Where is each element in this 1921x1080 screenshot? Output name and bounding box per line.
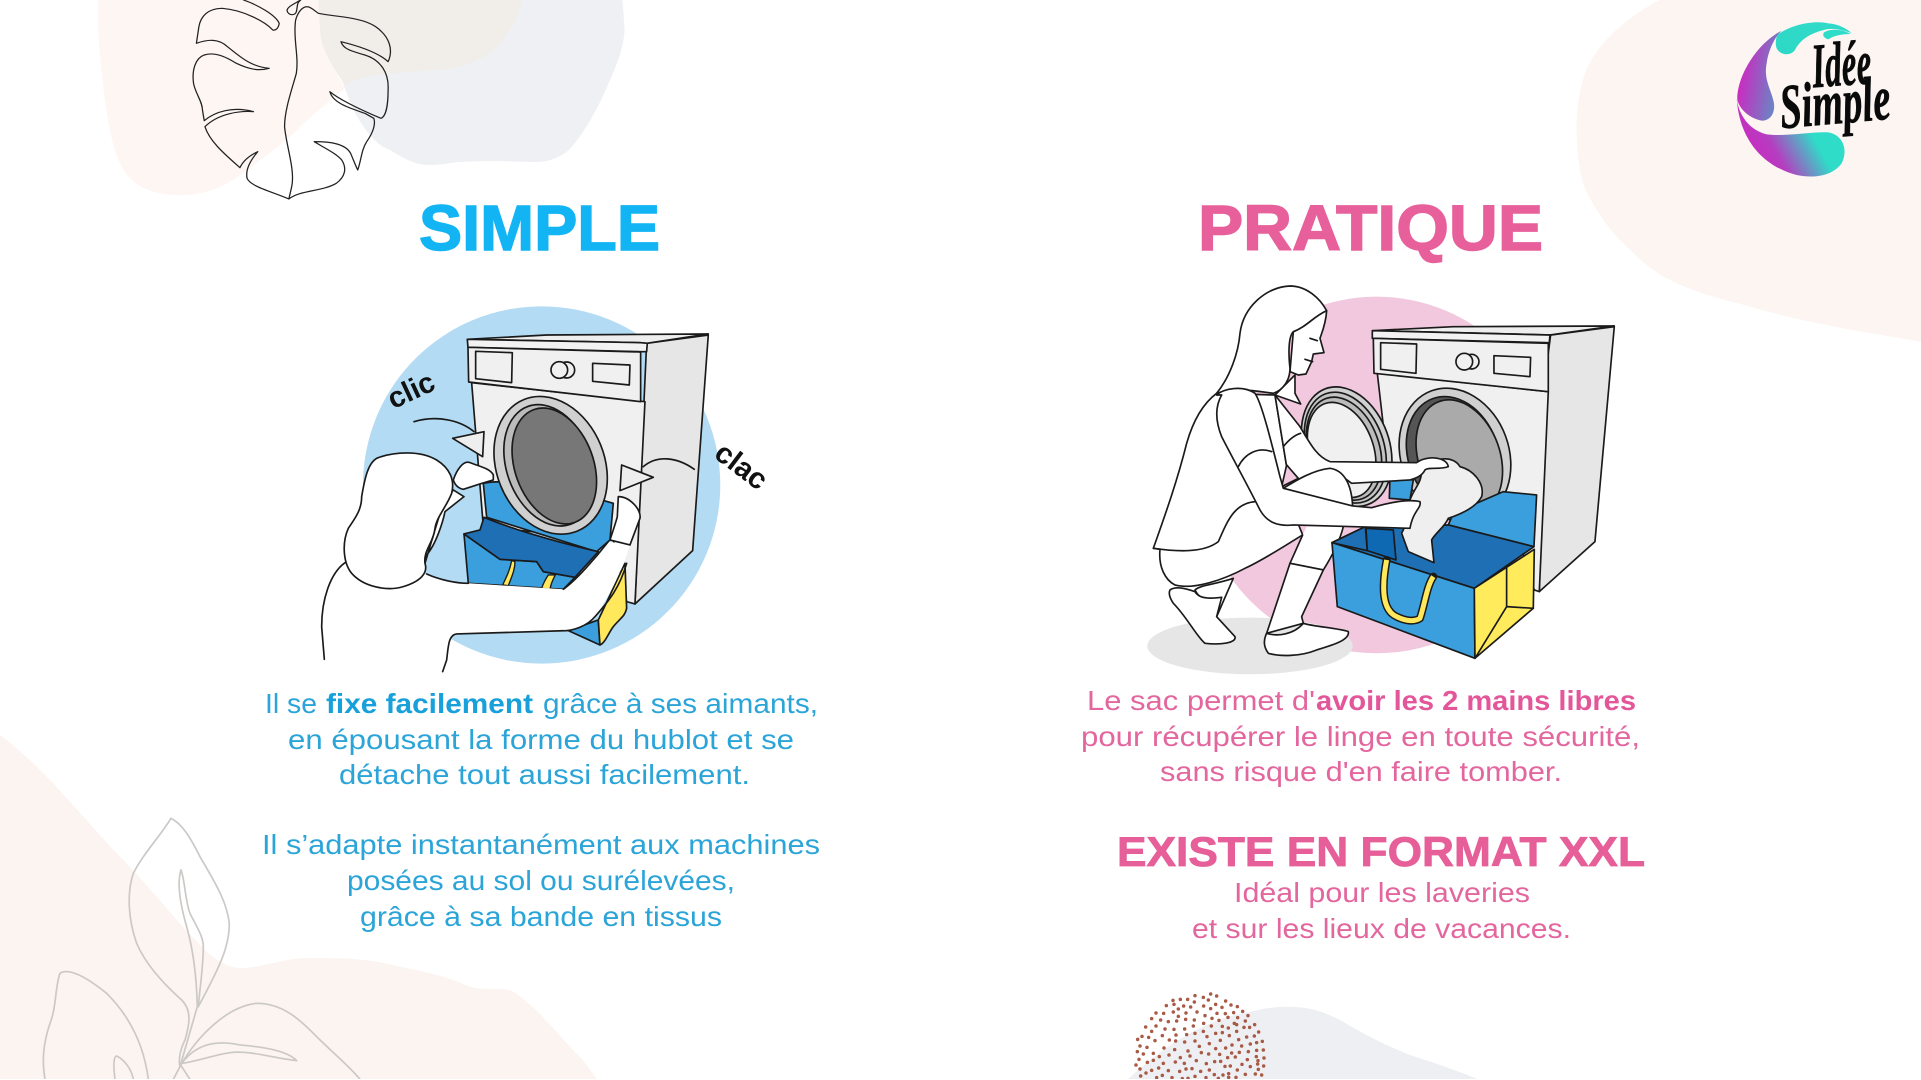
raised thigh [1290, 527, 1343, 570]
machine opening [1381, 372, 1529, 538]
arrow: right click [620, 459, 694, 491]
washing machine [467, 334, 708, 604]
line 1 bold: fixe facilement [326, 688, 533, 719]
line 5: posées au sol ou surélevées, [347, 865, 735, 896]
knee [1283, 468, 1353, 507]
woman head and arms [1217, 286, 1448, 528]
near sleeve edge [1238, 450, 1272, 467]
torso and thigh [1153, 393, 1303, 586]
floor shadow [1147, 618, 1353, 674]
text block: SIMPLE description [262, 688, 820, 932]
shin [1267, 563, 1323, 633]
arrow: left click [414, 419, 484, 457]
logo swoosh: top [1776, 22, 1852, 54]
heading: SIMPLE: SIMPLE [419, 192, 660, 264]
background blob: top left overlap [318, 0, 522, 85]
line 1 end: grâce à ses aimants, [543, 688, 818, 719]
decorative: brown dotted circle [1136, 994, 1264, 1079]
line 2: pour récupérer le linge en toute sécurité, [1081, 721, 1640, 752]
laundry [1402, 459, 1482, 563]
background blob: top left grey [318, 0, 625, 165]
person with hands on machine [322, 453, 640, 672]
logo: Idée Simple [1737, 22, 1893, 176]
open door [1285, 374, 1408, 519]
icon: monstera leaf line drawing [193, 0, 390, 199]
back leg [1195, 578, 1233, 617]
raised thigh edges [1290, 527, 1343, 570]
shirt hem [1153, 502, 1255, 551]
pink circle backdrop [1198, 297, 1555, 653]
hair [1217, 286, 1327, 393]
neck [1275, 375, 1301, 404]
background blob: bottom grey [1127, 1007, 1480, 1080]
background blob: top left beige [98, 0, 345, 195]
line 2: en épousant la forme du hublot et se [288, 724, 794, 755]
blue bag back [1332, 478, 1537, 588]
eye and mouth [1305, 338, 1317, 362]
heading: PRATIQUE: PRATIQUE [1198, 192, 1543, 264]
line 1 regular: Le sac permet d' [1087, 685, 1315, 716]
logo swoosh: small top [1823, 30, 1851, 39]
shoe: back [1169, 588, 1235, 644]
illustration: clipping the bag on the washing machine [322, 306, 774, 672]
blue bag [464, 482, 627, 645]
chest and far arm [1275, 395, 1448, 483]
blue circle backdrop [363, 306, 720, 664]
washing machine [1372, 326, 1614, 592]
machine door [474, 379, 627, 551]
line 1: Idéal pour les laveries [1234, 877, 1530, 908]
logo swoosh: left [1737, 31, 1782, 121]
text block: XXL description [1192, 877, 1571, 944]
shoe: front [1264, 623, 1348, 655]
icon: plant line drawing bottom left [43, 818, 360, 1079]
background blob: bottom left [0, 735, 597, 1080]
label: clac: clac [708, 436, 774, 497]
line 3: sans risque d'en faire tomber. [1160, 756, 1562, 787]
line 4: Il s’adapte instantanément aux machines [262, 829, 820, 860]
line 1 regular: Il se [265, 688, 317, 719]
heading: EXISTE EN FORMAT XXL: EXISTE EN FORMAT XXL [1117, 828, 1645, 875]
label: clic: clic [382, 365, 440, 416]
text block: PRATIQUE description [1081, 685, 1640, 787]
line 3: détache tout aussi facilement. [339, 759, 750, 790]
illustration: woman emptying laundry into the bag [1147, 286, 1614, 674]
face [1290, 311, 1327, 375]
logo swoosh: bottom [1737, 98, 1845, 176]
far sleeve edge [1283, 433, 1301, 447]
pink gap [1282, 465, 1298, 487]
line 6: grâce à sa bande en tissus [360, 901, 722, 932]
near arm [1217, 388, 1420, 528]
line 1 bold: avoir les 2 mains libres [1316, 685, 1636, 716]
background blob: top right [1577, 0, 1921, 342]
woman body and legs [1153, 393, 1348, 655]
blue bag front [1332, 543, 1534, 658]
line 2: et sur les lieux de vacances. [1192, 913, 1571, 944]
